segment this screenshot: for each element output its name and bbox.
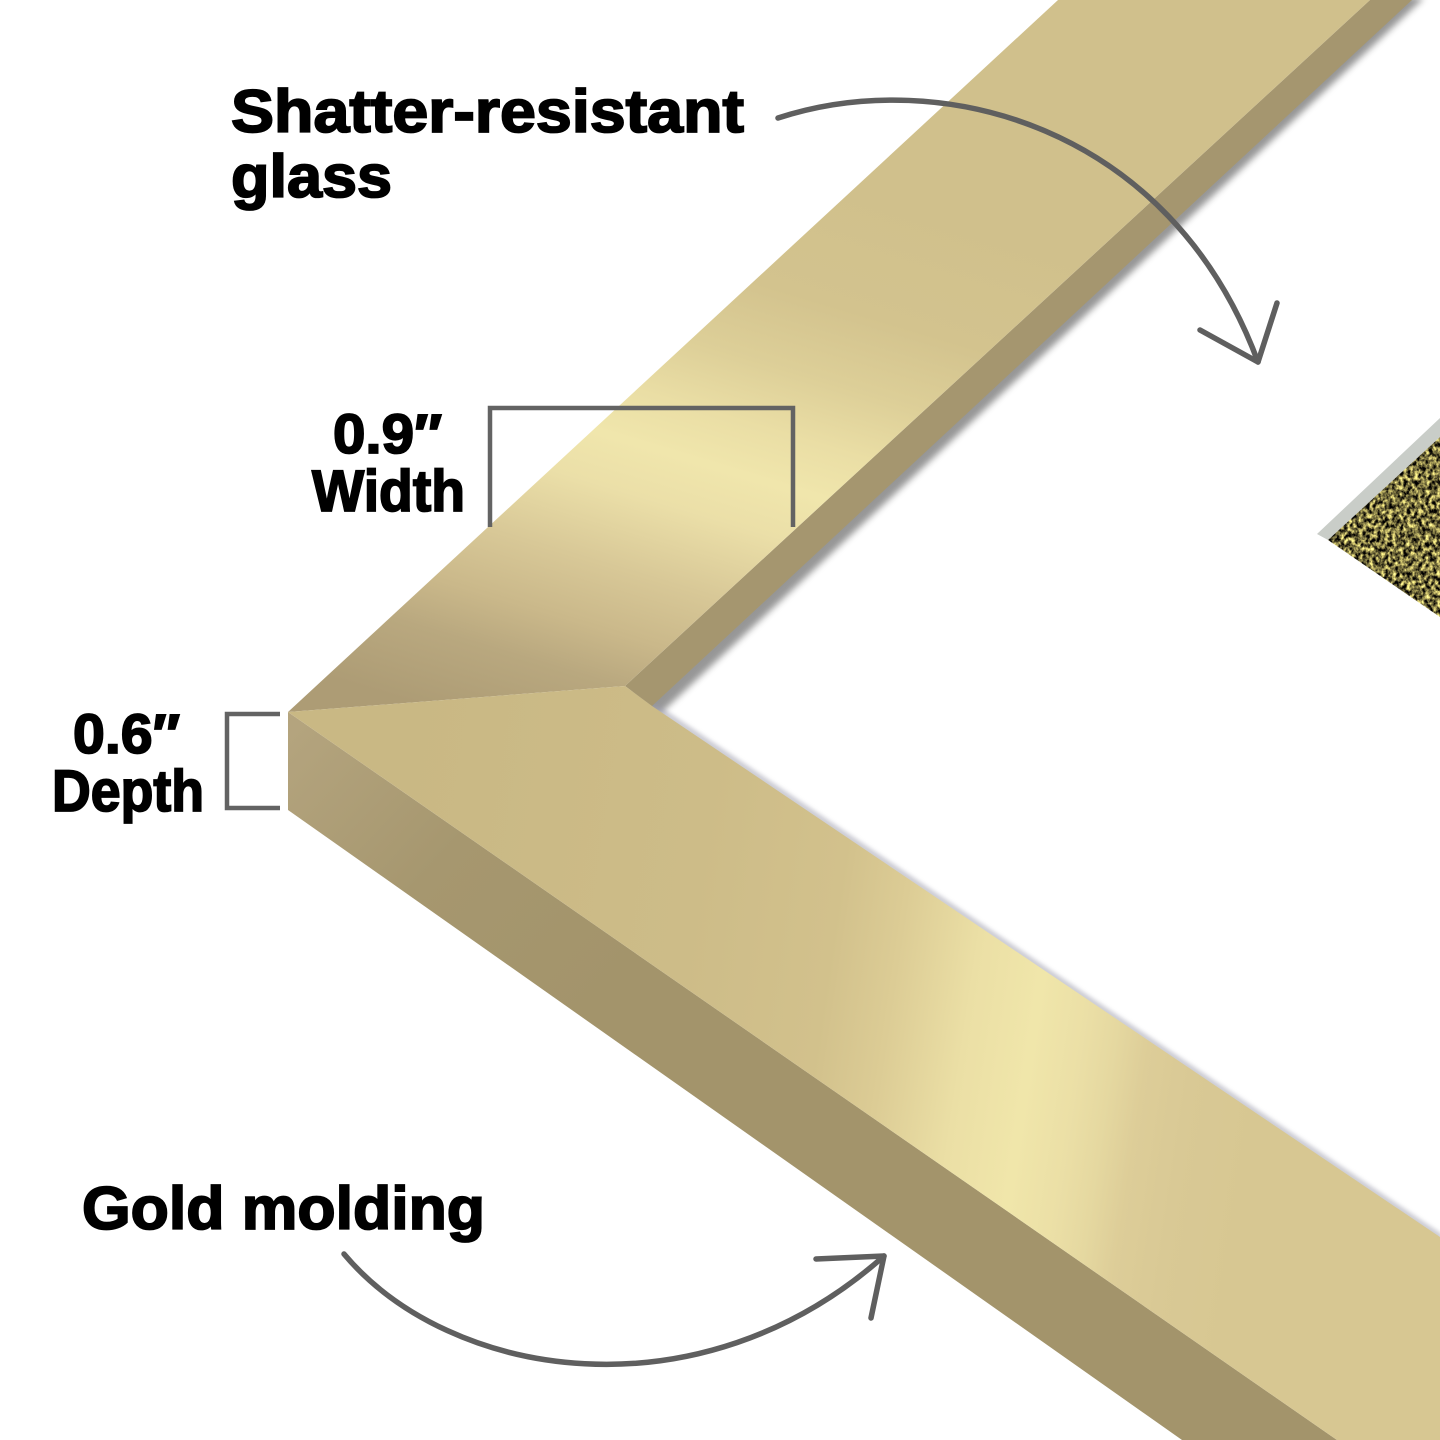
label: 0.6 inch depth (52, 702, 204, 824)
upper arm top face (288, 0, 1370, 712)
lower arm top face (288, 686, 1440, 1440)
arrow: to molding (344, 1254, 884, 1364)
upper arm side face (625, 0, 1412, 706)
photo: grass (1328, 437, 1440, 617)
label: shatter-resistant glass: glass (231, 143, 392, 210)
shadow: upper arm inner edge (620, 0, 1424, 714)
glass bevel strip (1317, 418, 1440, 540)
label: 0.9 inch width: Width (312, 459, 465, 524)
label: 0.9 inch width (312, 402, 465, 524)
label: 0.9 inch width: 0.9″ (333, 402, 442, 465)
label: gold molding: Gold molding (82, 1175, 485, 1242)
gold frame corner (288, 0, 1440, 1440)
label: 0.6 inch depth: Depth (52, 759, 204, 824)
bracket: depth (227, 714, 280, 808)
arrow: to glass (778, 100, 1277, 362)
photo print corner with glass edge (1317, 418, 1440, 617)
shadow: lower arm inner edge (640, 703, 1440, 1260)
lower arm side face (288, 712, 1337, 1440)
bracket: width (490, 408, 793, 527)
label: shatter-resistant glass: Shatter-resistant (231, 78, 744, 145)
label: 0.6 inch depth: 0.6″ (73, 702, 180, 765)
label: shatter-resistant glass (231, 78, 744, 210)
